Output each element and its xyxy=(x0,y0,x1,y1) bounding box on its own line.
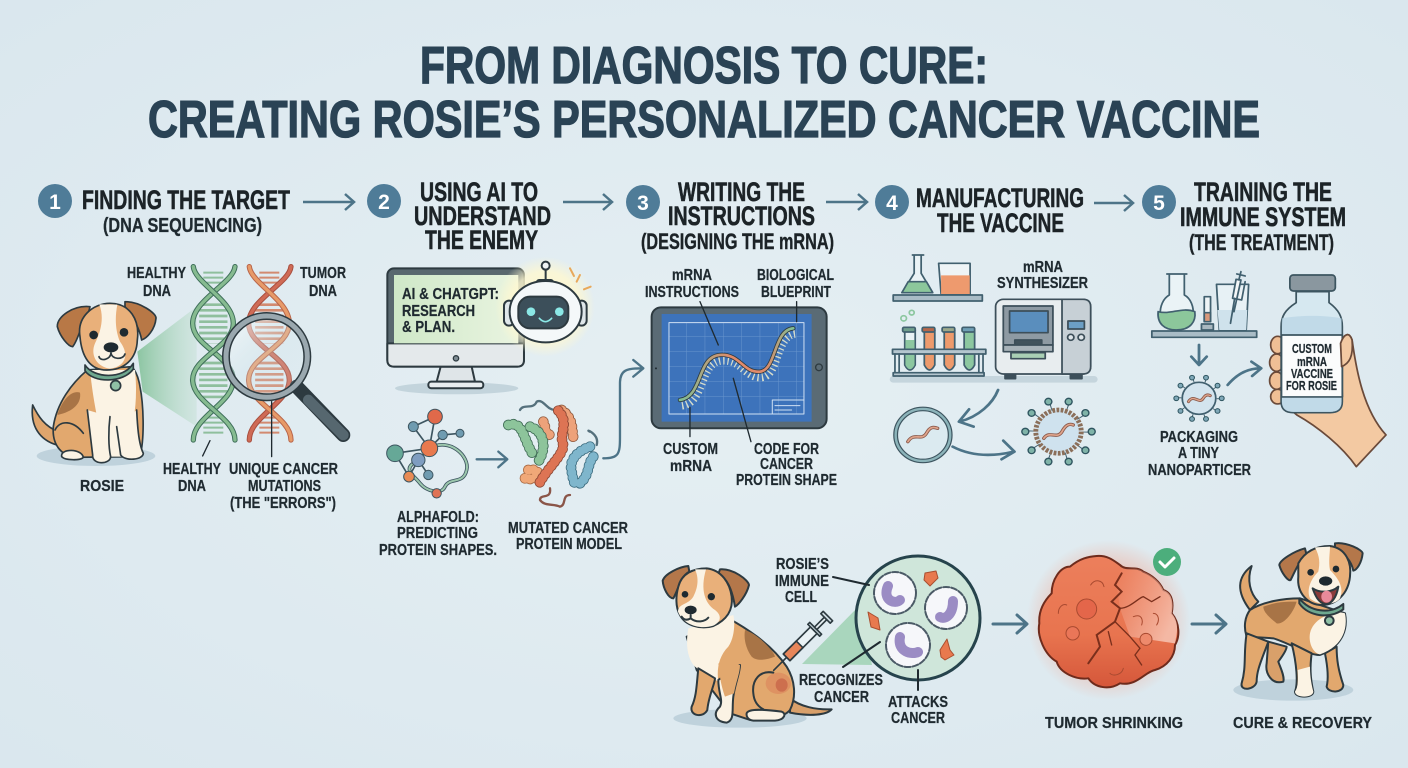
icon: magnifying glass xyxy=(226,316,343,435)
icon: mRNA synthesizer xyxy=(996,299,1091,379)
step 1 heading: (DNA SEQUENCING) xyxy=(103,215,262,237)
labels: immune response: ROSIE’S xyxy=(776,556,829,573)
step 2 heading: THE ENEMY xyxy=(425,225,538,255)
labels: DNA callouts: MUTATIONS xyxy=(248,478,321,495)
labels: immune response: CANCER xyxy=(814,689,869,706)
label: tumor shrinking: TUMOR SHRINKING xyxy=(1045,715,1183,732)
icon: check mark xyxy=(1153,548,1181,576)
illustration: Rosie and DNA xyxy=(32,267,343,466)
step 5 heading: IMMUNE SYSTEM xyxy=(1180,202,1346,232)
text: monitor screen: AI & CHATGPT: xyxy=(402,286,499,303)
title: FROM DIAGNOSIS TO CURE: xyxy=(420,37,988,95)
icon: mRNA strand in circle xyxy=(896,409,950,461)
step 5 heading xyxy=(1142,177,1346,255)
labels: immune response: CANCER xyxy=(891,710,945,727)
labels: mRNA blueprint: INSTRUCTIONS xyxy=(645,284,739,301)
icon: syringe xyxy=(768,610,834,676)
panel: manufacturing and packaging xyxy=(890,255,1386,479)
arrow: tumor to recovery xyxy=(1192,615,1226,633)
labels: AlphaFold and protein: ALPHAFOLD: xyxy=(397,509,479,526)
labels: immune response: RECOGNIZES xyxy=(799,672,883,689)
arrow: molecule to protein xyxy=(477,452,507,467)
icon: immune cells circle xyxy=(856,556,980,680)
step 3 heading: INSTRUCTIONS xyxy=(668,201,815,231)
panel: using AI xyxy=(379,257,837,559)
step 2 heading: UNDERSTAND xyxy=(414,201,551,231)
step 3 heading: WRITING THE xyxy=(678,177,805,207)
icon: Rosie the dog xyxy=(32,302,156,466)
step 3 heading xyxy=(626,177,834,254)
text: monitor screen xyxy=(402,286,499,336)
labels: DNA callouts: UNIQUE CANCER xyxy=(229,461,338,478)
label: mRNA synthesizer: SYNTHESIZER xyxy=(997,275,1088,292)
labels: immune response: ATTACKS xyxy=(888,694,948,711)
icon: tumor DNA helix xyxy=(249,267,291,440)
labels: mRNA blueprint: BIOLOGICAL xyxy=(757,267,834,284)
icon: injected dog xyxy=(663,566,834,728)
text: vial label: CUSTOM xyxy=(1292,341,1332,356)
icon: hand xyxy=(1270,335,1386,467)
label: packaging nanoparticle: A TINY xyxy=(1178,445,1219,462)
arrow: step 1 to 2 xyxy=(303,194,354,210)
step 4 heading: MANUFACTURING xyxy=(916,183,1084,213)
step 2 heading xyxy=(367,177,551,255)
labels: mRNA blueprint xyxy=(645,267,837,489)
labels: DNA callouts: HEALTHY xyxy=(163,461,221,478)
text: vial label: mRNA xyxy=(1297,354,1327,369)
arrow: nanoparticle to vial xyxy=(1228,362,1261,385)
step 5 heading: (THE TREATMENT) xyxy=(1189,230,1334,255)
labels: mRNA blueprint: BLUEPRINT xyxy=(761,284,831,301)
icon: small nanoparticle xyxy=(1174,375,1224,421)
panel: treatment and recovery xyxy=(663,540,1372,732)
step 1 heading xyxy=(38,184,290,237)
labels: DNA callouts: DNA xyxy=(178,478,206,495)
arrow: step 3 to 4 xyxy=(826,194,867,210)
text: vial label: VACCINE xyxy=(1291,366,1333,381)
labels: immune response xyxy=(775,556,948,727)
label: packaging nanoparticle xyxy=(1148,429,1251,479)
step 2 heading: USING AI TO xyxy=(420,177,538,207)
text: monitor screen: RESEARCH xyxy=(402,303,475,320)
arrow: synthesizer to mRNA xyxy=(959,390,998,427)
labels: DNA callouts: HEALTHY xyxy=(127,265,186,282)
label: packaging nanoparticle: PACKAGING xyxy=(1160,429,1238,446)
labels: mRNA blueprint: CODE FOR xyxy=(754,441,819,458)
illustrations: lab equipment, vial, hand xyxy=(890,255,1386,467)
step 5 heading: TRAINING THE xyxy=(1194,177,1332,207)
arrow: step 2 to 3 xyxy=(563,194,612,210)
label: mRNA synthesizer xyxy=(997,259,1088,292)
step 4 heading: 4 xyxy=(886,192,898,215)
arrow: mRNA to nanoparticle xyxy=(953,441,1014,459)
labels: AlphaFold and protein: PROTEIN SHAPES. xyxy=(379,542,497,559)
labels: DNA callouts: DNA xyxy=(143,283,171,300)
icon: lipid nanoparticle xyxy=(1022,398,1095,465)
step 4 heading: THE VACCINE xyxy=(937,208,1064,238)
labels: mRNA blueprint: CUSTOM xyxy=(663,441,718,458)
icon: AlphaFold molecule xyxy=(387,409,467,498)
labels: mRNA blueprint: PROTEIN SHAPE xyxy=(736,472,837,489)
arrow: protein to blueprint xyxy=(603,360,643,458)
step 1 heading: 1 xyxy=(49,191,61,214)
labels: DNA callouts: (THE "ERRORS") xyxy=(230,495,336,512)
step 5 heading: 5 xyxy=(1153,192,1165,215)
icon: computer monitor xyxy=(387,268,524,394)
labels: mRNA blueprint: mRNA xyxy=(672,267,712,284)
title xyxy=(148,37,1260,149)
green cone xyxy=(137,307,197,427)
labels: immune response: CELL xyxy=(785,589,817,606)
panel: finding the target xyxy=(32,265,346,512)
labels: AlphaFold and protein: PREDICTING xyxy=(397,525,478,542)
illustration: monitor, robot, molecule, tablet xyxy=(387,257,827,498)
icon: vaccine vial xyxy=(1281,275,1342,413)
label: cure and recovery: CURE & RECOVERY xyxy=(1233,715,1372,732)
step 1 heading: FINDING THE TARGET xyxy=(82,185,290,215)
icon: shrinking tumor xyxy=(1027,540,1190,700)
labels: DNA callouts: ROSIE xyxy=(80,478,124,495)
icon: AI robot xyxy=(495,257,595,357)
labels: AlphaFold and protein: PROTEIN MODEL xyxy=(516,536,622,553)
arrow: shelf to packaging xyxy=(1191,345,1207,365)
step 2 heading: 2 xyxy=(378,191,390,214)
labels: mRNA blueprint: mRNA xyxy=(670,458,712,475)
step 4 heading xyxy=(875,183,1084,238)
arrow: cells to tumor xyxy=(993,615,1027,633)
icon: lab shelf with flask and beaker xyxy=(893,255,982,301)
text: vial label: FOR ROSIE xyxy=(1286,378,1337,393)
label: mRNA synthesizer: mRNA xyxy=(1023,259,1063,276)
icon: healthy DNA helix xyxy=(193,267,235,440)
labels: DNA callouts: DNA xyxy=(309,283,337,300)
icon: mutated protein model xyxy=(508,401,597,507)
label: packaging nanoparticle: NANOPARTICER xyxy=(1148,462,1251,479)
icon: test tube rack xyxy=(890,310,1098,383)
text: vial label xyxy=(1286,341,1337,393)
labels: DNA callouts: TUMOR xyxy=(300,265,346,282)
step 3 heading: (DESIGNING THE mRNA) xyxy=(641,229,834,254)
step 3 heading: 3 xyxy=(637,192,649,215)
labels: mRNA blueprint: CANCER xyxy=(760,456,813,473)
labels: DNA callouts xyxy=(80,265,346,512)
arrow: step 4 to 5 xyxy=(1094,195,1133,211)
icon: treatment lab shelf xyxy=(1152,272,1257,337)
labels: AlphaFold and protein xyxy=(379,509,628,559)
text: monitor screen: & PLAN. xyxy=(402,319,455,336)
labels: AlphaFold and protein: MUTATED CANCER xyxy=(508,520,628,537)
icon: recovered dog xyxy=(1233,543,1363,701)
icon: tablet blueprint xyxy=(652,307,827,428)
labels: immune response: IMMUNE xyxy=(775,573,829,590)
icon: green beam xyxy=(802,605,872,665)
